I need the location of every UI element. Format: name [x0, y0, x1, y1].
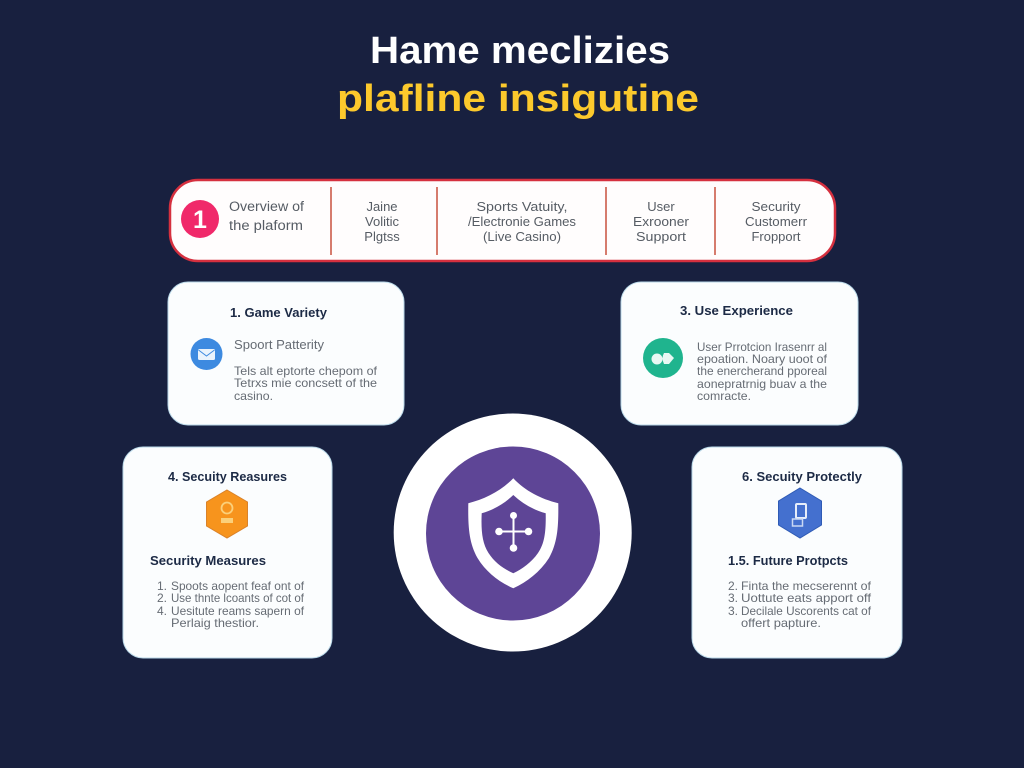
- text block: Tetrxs mie concsett of the: [234, 376, 377, 390]
- numbered list: 2.: [728, 579, 738, 593]
- panel: future projects: [692, 447, 902, 658]
- numbered list: Perlaig thestior.: [171, 616, 259, 630]
- column: game types: Plgtss: [364, 229, 400, 244]
- text block: the enercherand pporeal: [697, 364, 827, 378]
- column: security: Fropport: [752, 229, 801, 244]
- icon: number badge: 1: [193, 206, 207, 234]
- column: security: Customerr: [745, 214, 808, 229]
- heading: 1. Game Variety: [230, 306, 327, 320]
- text block: comracte.: [697, 389, 751, 403]
- column: security: [745, 199, 808, 244]
- numbered list: [157, 579, 305, 630]
- text block: [234, 364, 378, 403]
- numbered list: 4.: [157, 604, 167, 618]
- panel: overview bar: [170, 180, 835, 261]
- numbered list: Spoots aopent feaf ont of: [171, 579, 305, 593]
- subheading: Spoort Patterity: [234, 338, 325, 352]
- panel: game variety: [168, 282, 404, 425]
- numbered list: Decilale Uscorents cat of: [741, 604, 872, 618]
- icon: shield: [468, 478, 558, 588]
- title: [337, 30, 699, 120]
- overview label: Overview of: [229, 199, 304, 214]
- numbered list: 3.: [728, 591, 738, 605]
- title: plafline insigutine: [337, 78, 699, 120]
- text block: Tels alt eptorte chepom of: [234, 364, 378, 378]
- column: sports and games: Sports Vatuity,: [476, 199, 568, 214]
- heading: 6. Secuity Protectly: [742, 470, 862, 484]
- icon: envelope: [190, 338, 222, 370]
- numbered list: Uesitute reams sapern of: [171, 604, 305, 618]
- numbered list: 2.: [157, 591, 167, 605]
- subheading: Security Measures: [150, 554, 266, 568]
- column: security: Security: [752, 199, 801, 214]
- numbered list: Use thnte lcoants of cot of: [171, 591, 305, 605]
- text block: aonepratrnig buav a the: [697, 377, 827, 391]
- icon: blue hexagon: [778, 488, 822, 538]
- numbered list: Finta the mecserennt of: [741, 579, 872, 593]
- overview label: [229, 199, 304, 233]
- panel: user experience: [621, 282, 858, 425]
- title: Hame meclizies: [370, 30, 670, 72]
- overview label: the plaform: [229, 218, 303, 233]
- icon: green circle: [643, 338, 683, 378]
- heading: 4. Secuity Reasures: [168, 470, 287, 484]
- panel: security measures: [123, 447, 332, 658]
- numbered list: 1.: [157, 579, 167, 593]
- heading: 3. Use Experience: [680, 304, 793, 318]
- icon: cross: [495, 512, 532, 552]
- numbered list: [728, 579, 872, 630]
- column: user support: Support: [636, 229, 686, 244]
- text block: casino.: [234, 389, 273, 403]
- column: sports and games: /Electronie Games: [468, 214, 577, 229]
- icon: number badge: [181, 200, 219, 238]
- text block: epoation. Noary uoot of: [697, 352, 828, 366]
- text block: User Prrotcion Irasenrr al: [697, 340, 827, 354]
- column: game types: Jaine: [366, 199, 398, 214]
- icon: orange hexagon: [206, 490, 248, 538]
- text block: [697, 340, 828, 403]
- central shield emblem: [394, 414, 632, 652]
- numbered list: offert papture.: [741, 616, 821, 630]
- column: user support: [633, 199, 690, 244]
- column: game types: Volitic: [365, 214, 399, 229]
- column: user support: Exrooner: [633, 214, 690, 229]
- column: sports and games: [468, 199, 577, 244]
- numbered list: 3.: [728, 604, 738, 618]
- numbered list: Uottute eats apport off: [741, 591, 872, 605]
- subheading: 1.5. Future Protpcts: [728, 554, 848, 568]
- column: game types: [364, 199, 400, 244]
- column: user support: User: [647, 199, 675, 214]
- column: sports and games: (Live Casino): [483, 229, 561, 244]
